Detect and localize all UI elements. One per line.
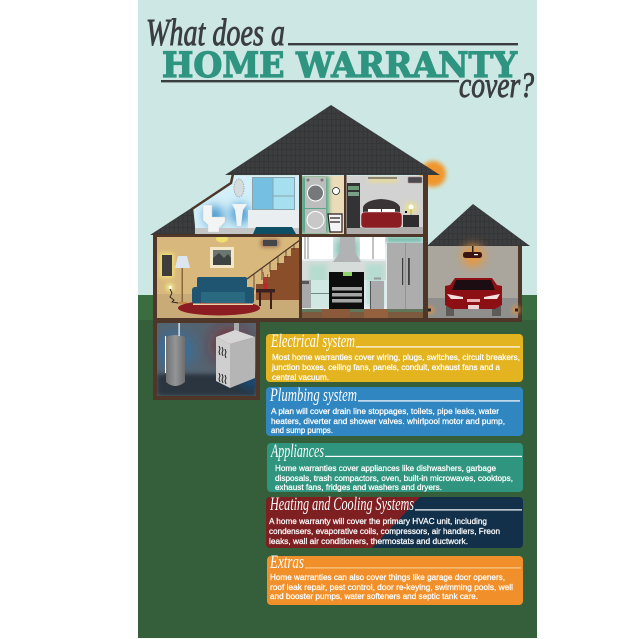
sun glow behind roof <box>420 161 446 187</box>
house framing <box>153 175 428 322</box>
bathroom window <box>252 177 295 210</box>
trash can <box>370 278 384 309</box>
stove <box>329 272 364 309</box>
wood floor <box>300 309 423 318</box>
title: HOME WARRANTY <box>162 45 518 86</box>
panel: appliances <box>267 441 523 492</box>
panel: plumbing system: and sump pumps. <box>271 425 333 435</box>
refrigerator <box>387 243 423 309</box>
bed <box>361 199 402 228</box>
panel: electrical system: Electrical system <box>270 331 355 352</box>
wall vent <box>408 177 422 183</box>
panel: plumbing system: A plan will cover drain line stoppages, toilets, pipe leaks, water <box>271 406 499 416</box>
garage interior <box>428 246 518 318</box>
background sky <box>138 0 537 295</box>
living room <box>157 236 300 318</box>
lower left roof <box>150 207 196 235</box>
main roof <box>225 105 440 175</box>
panel: heating and cooling systems: A home warranty will cover the primary HVAC unit, including <box>269 516 487 526</box>
panel: extras: Home warranties can also cover things like garage door openers, <box>270 572 505 582</box>
ceiling light <box>216 236 228 242</box>
door panel <box>160 253 174 278</box>
bathroom mirror <box>234 179 244 197</box>
range hood <box>333 237 361 262</box>
panel: appliances: Home warranties cover appliances like dishwashers, garbage <box>275 463 496 473</box>
sofa <box>192 277 254 305</box>
pedestal sink <box>232 204 247 226</box>
lower cabinets and dishwasher <box>301 280 329 308</box>
bath mat <box>253 227 296 234</box>
panel: heating and cooling systems: leaks, wall air conditioners, thermostats and ductwork. <box>269 536 468 546</box>
panel: appliances: disposals, trash compactors, oven, built-in microwaves, cooktops, <box>275 473 513 483</box>
furnace <box>216 323 255 388</box>
panel: electrical system: junction boxes, ceiling fans, panels, conduit, exhaust fans and a <box>271 362 500 372</box>
staircase <box>247 240 300 300</box>
panel: electrical system: central vacuum. <box>272 372 329 382</box>
rug <box>178 300 260 316</box>
laundry basket <box>328 214 342 232</box>
background lawn <box>138 295 537 638</box>
nightstand and lamp <box>403 202 419 227</box>
washer and dryer <box>305 177 326 233</box>
panel: heating and cooling systems: condensers, evaporative coils, compressors, air handlers, Freon <box>269 526 500 536</box>
bookshelf <box>347 183 360 228</box>
panel: extras: roof leak repair, pest control, door re-keying, swimming pools, well <box>270 582 513 592</box>
panel: heating and cooling systems: Heating and Cooling Systems <box>269 494 414 515</box>
panel: extras: and booster pumps, water softeners and septic tank care. <box>270 591 478 601</box>
panel: electrical system: Most home warranties cover wiring, plugs, switches, circuit breakers, <box>272 352 520 362</box>
title: cover? <box>459 65 534 105</box>
panel: plumbing system: Plumbing system <box>269 385 357 406</box>
infographic poster <box>138 0 537 638</box>
wall clock <box>332 188 340 194</box>
water heater <box>165 323 185 386</box>
house <box>150 105 440 400</box>
framed picture <box>210 247 234 268</box>
kitchen <box>300 236 423 318</box>
panel: extras <box>267 552 523 605</box>
upper cabinets <box>301 237 385 259</box>
laundry room <box>300 176 344 234</box>
bathroom <box>190 176 300 234</box>
red car <box>445 278 502 316</box>
side table with vase <box>256 272 275 309</box>
panel: appliances: Appliances <box>270 441 324 462</box>
garage walls <box>423 246 522 322</box>
panel: appliances: exhaust fans, fridges and washers and dryers. <box>275 482 442 492</box>
garage floor lights <box>426 306 520 314</box>
garage <box>423 204 530 322</box>
garage door opener with light <box>462 245 484 267</box>
wall vent <box>261 239 279 247</box>
toilet <box>203 205 225 232</box>
panel: extras: Extras <box>269 552 304 573</box>
ceiling light <box>368 178 397 182</box>
garage roof <box>427 204 530 246</box>
title: What does a <box>146 12 285 54</box>
wall outlet and cord <box>166 283 178 303</box>
panel: plumbing system: heaters, diverter and shower valves. whirlpool motor and pump, <box>271 416 505 426</box>
panel: plumbing system <box>266 385 523 436</box>
floor lamp <box>175 256 190 304</box>
basement <box>153 322 260 400</box>
panel: heating and cooling systems <box>266 494 523 548</box>
panel: electrical system <box>266 331 523 382</box>
title <box>146 12 534 105</box>
bedroom <box>346 176 423 234</box>
gutter drain pipe <box>192 174 233 209</box>
